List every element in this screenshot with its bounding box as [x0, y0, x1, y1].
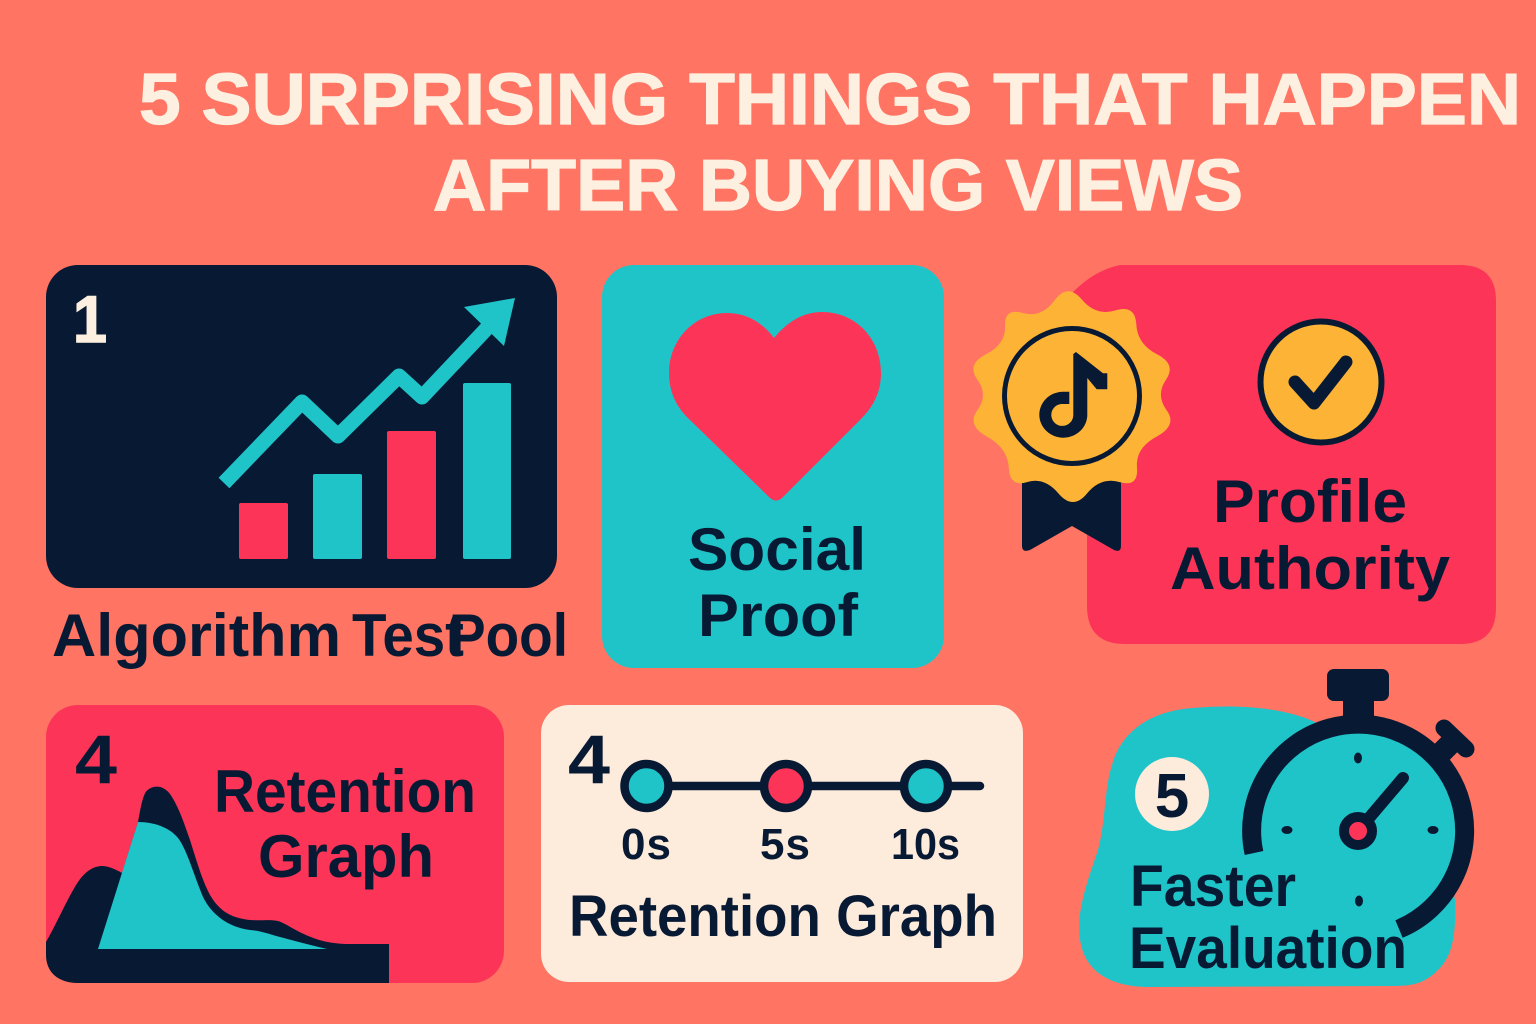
- arrow: rising trend: [224, 298, 515, 483]
- time labels: 5s: [760, 820, 810, 869]
- panel label: Social: [688, 516, 866, 583]
- area chart: [46, 787, 389, 983]
- number 4: 4: [75, 721, 117, 798]
- title: [139, 60, 1521, 226]
- panel label: Faster: [1130, 854, 1296, 919]
- bar chart: [239, 383, 511, 559]
- panel label: Test: [352, 602, 464, 669]
- panel: faster evaluation: [1079, 669, 1466, 987]
- panel label: [214, 758, 476, 890]
- panel: retention timeline: [541, 705, 1023, 982]
- number 5: [1135, 757, 1209, 831]
- icon: heart: [669, 312, 881, 500]
- number 1: 1: [73, 282, 107, 356]
- panel label: Retention Graph: [569, 884, 997, 949]
- panel label: [1129, 854, 1407, 981]
- time labels: 0s: [621, 820, 671, 869]
- icon: music note: [1039, 352, 1107, 438]
- timeline: [624, 764, 980, 808]
- panel label: Evaluation: [1129, 916, 1407, 981]
- panel label: [1170, 468, 1451, 602]
- number 4: 4: [568, 721, 610, 798]
- panel label: Retention: [214, 758, 476, 825]
- panel label: Algorithm: [52, 602, 341, 669]
- time labels: 10s: [891, 820, 960, 869]
- time labels: [621, 820, 960, 869]
- number 5: 5: [1155, 762, 1189, 831]
- icon: stopwatch: [1252, 669, 1466, 929]
- panel label: Pool: [449, 602, 568, 669]
- panel label: [688, 516, 866, 649]
- panel label: Proof: [698, 582, 859, 649]
- panel: algorithm test pool: [46, 265, 568, 669]
- panel: retention graph red: [46, 705, 504, 983]
- panel: profile authority: [973, 265, 1496, 644]
- panel label: Profile: [1213, 468, 1407, 535]
- icon: award rosette: [973, 291, 1170, 551]
- panel: social proof: [602, 265, 944, 668]
- panel label: Authority: [1170, 535, 1451, 602]
- panel label: Graph: [258, 823, 434, 890]
- panel label: [52, 602, 568, 669]
- title: AFTER BUYING VIEWS: [433, 146, 1243, 226]
- icon: check badge: [1260, 322, 1382, 442]
- title: 5 SURPRISING THINGS THAT HAPPEN: [139, 60, 1521, 140]
